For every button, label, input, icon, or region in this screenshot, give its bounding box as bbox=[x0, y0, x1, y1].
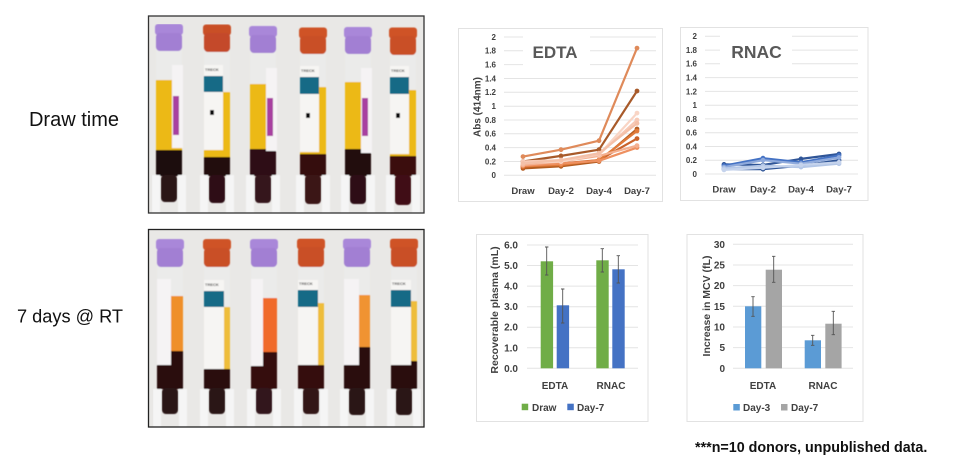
x axis labels: Day-4 bbox=[586, 186, 613, 197]
tube: RNAC 3 at draw: TRECK bbox=[391, 68, 405, 73]
y axis ticks: 5 bbox=[719, 343, 725, 354]
x axis labels: Day-4 bbox=[788, 184, 815, 196]
y axis ticks: 10 bbox=[714, 322, 725, 334]
chart title: RNAC: RNAC bbox=[731, 42, 782, 62]
x axis labels: Day-2 bbox=[548, 186, 574, 197]
x axis labels bbox=[712, 184, 852, 196]
y axis ticks: 2 bbox=[492, 33, 497, 42]
x axis labels bbox=[542, 381, 625, 392]
y axis ticks: 1.4 bbox=[485, 74, 497, 83]
chart title: EDTA: EDTA bbox=[532, 43, 578, 62]
y axis ticks: 0.6 bbox=[485, 130, 497, 139]
legend: Day-7 bbox=[791, 403, 819, 414]
error bars bbox=[545, 247, 620, 323]
y axis ticks: 1.0 bbox=[504, 343, 518, 354]
y axis ticks: 20 bbox=[714, 281, 725, 292]
y axis ticks: 0 bbox=[693, 170, 698, 179]
line chart: EDTA absorbance bbox=[458, 28, 662, 202]
y axis ticks: 1.2 bbox=[686, 87, 698, 96]
tube: EDTA 2 at draw bbox=[246, 26, 280, 213]
y axis ticks: 0 bbox=[492, 171, 497, 180]
y axis ticks: 1 bbox=[492, 102, 497, 111]
x axis labels bbox=[750, 381, 837, 392]
tube: RNAC 3 at 7 days: TRECK bbox=[392, 281, 406, 286]
y axis ticks bbox=[504, 240, 518, 375]
y axis title: Recoverable plasma (mL) bbox=[489, 246, 501, 374]
bars: draw bbox=[541, 260, 609, 368]
bar chart: increase in MCV bbox=[687, 234, 863, 422]
y axis ticks: 3.0 bbox=[504, 302, 518, 313]
x axis labels: Day-7 bbox=[624, 186, 650, 197]
y axis ticks: 0.6 bbox=[686, 129, 698, 138]
photo panel: tubes at draw time bbox=[148, 16, 424, 213]
legend: Day-7 bbox=[577, 403, 605, 414]
y axis title: Abs (414nm) bbox=[472, 77, 484, 137]
bars: day-3 bbox=[745, 306, 821, 368]
tube: EDTA 2 at 7 days bbox=[247, 239, 281, 427]
y axis ticks: 15 bbox=[714, 302, 725, 313]
y axis ticks: 0.2 bbox=[485, 157, 497, 166]
y axis ticks: 4.0 bbox=[504, 282, 518, 293]
y axis ticks: 2 bbox=[693, 32, 698, 41]
data series: EDTA donors bbox=[523, 48, 637, 168]
tube: EDTA 1 at draw bbox=[152, 24, 186, 213]
error bars bbox=[751, 256, 835, 345]
y axis ticks bbox=[485, 33, 497, 180]
photo panel: tubes after 7 days at room temperature bbox=[148, 230, 424, 427]
x axis labels: Draw bbox=[712, 184, 736, 196]
tube: RNAC 1 at draw bbox=[200, 24, 234, 213]
legend: Draw bbox=[532, 403, 557, 414]
y axis ticks: 1.2 bbox=[485, 88, 497, 97]
y axis ticks: 0.8 bbox=[686, 115, 698, 124]
y axis ticks: 25 bbox=[714, 260, 725, 272]
tube: EDTA 3 at 7 days bbox=[340, 238, 374, 427]
legend: Day-3 bbox=[743, 403, 771, 414]
tube: RNAC 2 at draw bbox=[296, 28, 330, 213]
tube: EDTA 3 at draw bbox=[341, 27, 375, 213]
x axis labels: Day-7 bbox=[826, 184, 852, 196]
y axis ticks: 6.0 bbox=[504, 240, 518, 252]
row label: 7 days at room temperature: 7 days @ RT bbox=[17, 306, 123, 326]
y axis ticks: 1.4 bbox=[686, 74, 698, 82]
y axis ticks: 30 bbox=[714, 240, 725, 251]
x axis labels: EDTA bbox=[750, 381, 776, 392]
row label: draw time: Draw time bbox=[29, 109, 119, 131]
y axis ticks: 1 bbox=[693, 101, 698, 110]
tube: RNAC 2 at 7 days bbox=[294, 238, 328, 427]
x axis labels: Day-2 bbox=[750, 184, 776, 196]
y axis ticks bbox=[686, 32, 698, 179]
y axis ticks: 1.8 bbox=[485, 47, 497, 56]
y axis ticks: 0 bbox=[719, 364, 725, 375]
tube: RNAC 2 at draw: TRECK bbox=[301, 68, 315, 73]
y axis ticks: 0.4 bbox=[686, 142, 698, 151]
y axis ticks: 0.4 bbox=[485, 144, 497, 152]
y axis ticks bbox=[714, 240, 725, 375]
y axis ticks: 0.0 bbox=[504, 364, 518, 375]
line chart: RNAC absorbance bbox=[680, 28, 868, 200]
y axis ticks: 1.8 bbox=[686, 46, 698, 55]
y axis title: Increase in MCV (fL) bbox=[701, 256, 713, 356]
tube: RNAC 1 at 7 days: TRECK bbox=[205, 282, 219, 287]
tube: RNAC 1 at draw: TRECK bbox=[205, 67, 219, 72]
y axis ticks: 0.2 bbox=[686, 156, 698, 165]
tube: RNAC 1 at 7 days bbox=[200, 239, 234, 427]
x axis labels: RNAC bbox=[597, 381, 625, 392]
x axis labels: EDTA bbox=[542, 381, 568, 392]
bars: day-7 bbox=[766, 270, 842, 368]
tube: RNAC 3 at 7 days bbox=[387, 238, 421, 427]
footnote: ***n=10 donors, unpublished data. bbox=[695, 440, 927, 456]
x axis labels bbox=[511, 186, 650, 197]
x axis labels: Draw bbox=[511, 186, 535, 197]
y axis ticks: 2.0 bbox=[504, 323, 518, 334]
y axis ticks: 0.8 bbox=[485, 116, 497, 125]
legend bbox=[522, 403, 605, 414]
bar chart: recoverable plasma bbox=[476, 234, 648, 422]
tube: RNAC 3 at draw bbox=[386, 28, 420, 213]
x axis labels: RNAC bbox=[809, 381, 837, 392]
y axis ticks: 1.6 bbox=[686, 60, 698, 69]
bars: day-7 bbox=[557, 269, 625, 368]
legend bbox=[733, 403, 819, 414]
tube: EDTA 1 at 7 days bbox=[153, 239, 187, 427]
data series: RNAC donors bbox=[724, 154, 839, 170]
y axis ticks: 1.6 bbox=[485, 60, 497, 70]
tube: RNAC 2 at 7 days: TRECK bbox=[299, 281, 313, 286]
y axis ticks: 5.0 bbox=[504, 261, 518, 272]
